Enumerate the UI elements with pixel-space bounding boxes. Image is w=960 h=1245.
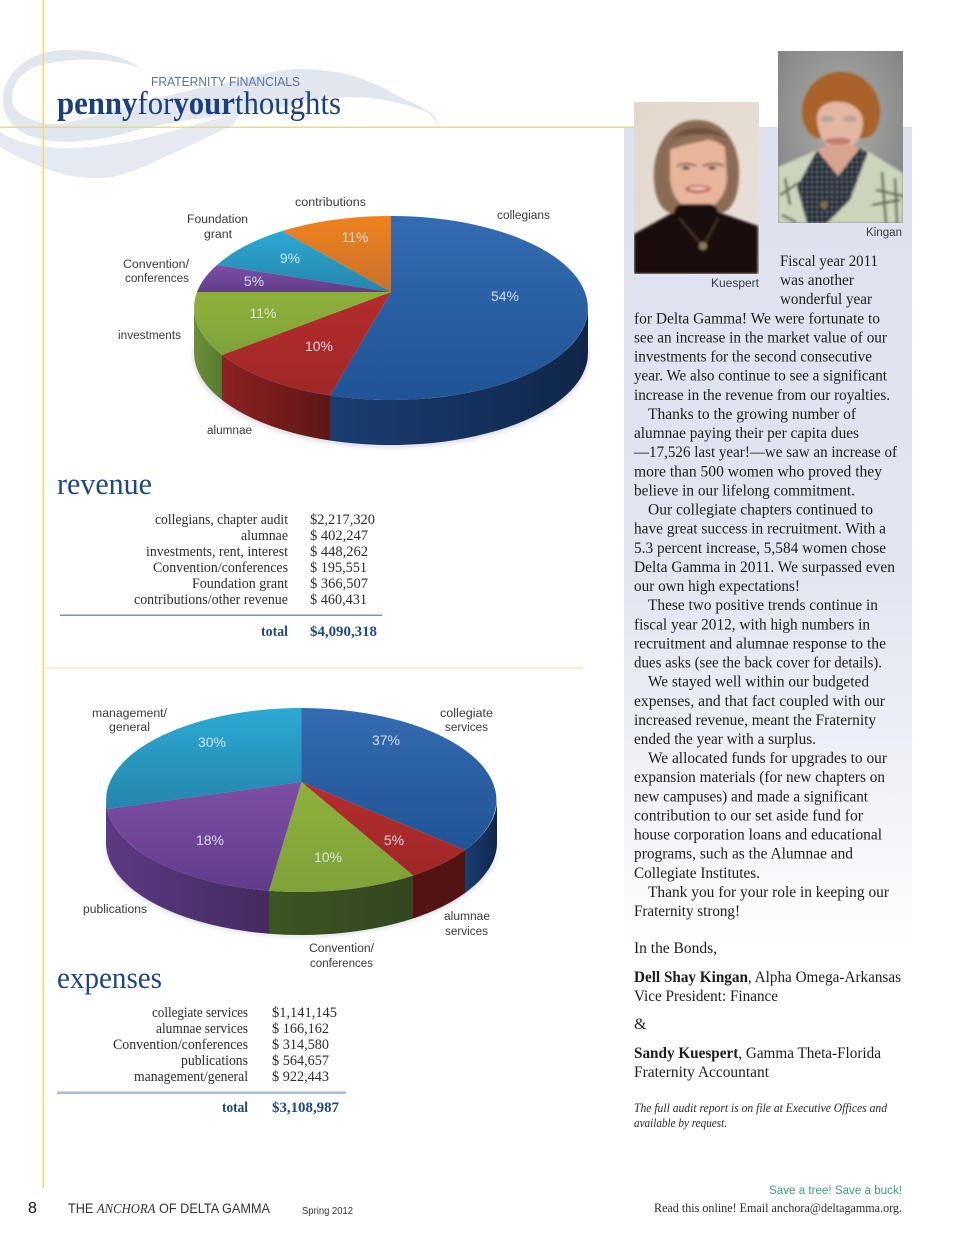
article body text: increased revenue, meant the Fraternity [634, 712, 876, 729]
percent labels: 30% [198, 734, 226, 750]
photo captions: Kingan [866, 227, 902, 239]
slice name labels: collegiate [440, 708, 493, 720]
percent labels: 10% [314, 849, 342, 865]
photo captions: Kuespert [711, 278, 760, 290]
article body text: expenses, and that fact coupled with our [634, 693, 886, 710]
footer: page number and publication: 8 [28, 1200, 37, 1217]
article body text: for Delta Gamma! We were fortunate to [634, 310, 880, 327]
expenses labels [113, 1005, 248, 1085]
right column tinted panel [624, 127, 912, 950]
expenses labels: management/general [134, 1069, 248, 1085]
signature block: Sandy Kuespert, Gamma Theta-Florida [634, 1045, 881, 1062]
expenses labels: alumnae services [156, 1021, 248, 1037]
expenses total [222, 1100, 339, 1116]
article body text: wonderful year [780, 291, 873, 308]
article body text: Our collegiate chapters continued to [648, 502, 873, 519]
expenses values [272, 1005, 337, 1085]
article body text: We allocated funds for upgrades to our [648, 750, 888, 767]
slice: alumnae services 5% [302, 782, 465, 876]
photo captions [711, 227, 902, 290]
slice name labels: services [445, 722, 488, 734]
footer: page number and publication: THE ANCHORA OF DELTA GAMMA [68, 1201, 270, 1216]
slice: foundation grant 9% [217, 231, 391, 292]
slice name labels: publications [83, 904, 147, 916]
percent labels: 5% [244, 273, 264, 289]
slice name labels [83, 708, 493, 970]
article body text: Delta Gamma in 2011. We surpassed even [634, 559, 895, 576]
article body text: contribution to our set aside fund for [634, 808, 864, 824]
percent labels: 18% [196, 832, 224, 848]
expenses table [57, 1005, 346, 1116]
article body text: house corporation loans and educational [634, 827, 883, 844]
article body text: fiscal year 2012, with high numbers in [634, 616, 870, 633]
slice name labels: alumnae [207, 425, 252, 437]
slice name labels: management/ [92, 708, 168, 720]
slice name labels: contributions [295, 197, 366, 209]
percent labels: 54% [491, 288, 519, 304]
revenue values: $2,217,320 [310, 512, 375, 528]
article body text: see an increase in the market value of our [634, 330, 888, 346]
footer: page number and publication [28, 1200, 353, 1217]
slice name labels: Foundation [187, 214, 248, 226]
revenue values: $ 366,507 [310, 576, 368, 592]
expenses labels: publications [181, 1053, 248, 1069]
soft shadow [193, 264, 589, 448]
article body text: have great success in recruitment. With a [634, 521, 886, 538]
heading: expenses: expenses [57, 960, 162, 995]
article body text: 5.3 percent increase, 5,584 women chose [634, 540, 886, 557]
slice: collegiate services 37% [302, 708, 496, 850]
percent labels: 5% [384, 832, 404, 848]
slice name labels: grant [204, 229, 233, 241]
article body text: We stayed well within our budgeted [648, 674, 869, 691]
kicker: fraternity financials: FRATERNITY FINANCIALS [151, 74, 300, 89]
revenue labels: investments, rent, interest [146, 544, 288, 560]
photo: Kuespert [634, 102, 759, 274]
signature block: Dell Shay Kingan, Alpha Omega-Arkansas [634, 969, 901, 986]
footer: save a tree callout: Save a tree! Save a buck! [769, 1185, 902, 1197]
article body text: Collegiate Institutes. [634, 865, 760, 882]
signature block: Fraternity Accountant [634, 1064, 770, 1081]
article body text: These two positive trends continue in [648, 597, 878, 614]
revenue labels: contributions/other revenue [134, 592, 288, 608]
expenses values: $ 314,580 [272, 1037, 329, 1053]
signature block [634, 940, 901, 1081]
slice: convention/conferences 10% [269, 782, 413, 892]
yellow page rules [0, 0, 634, 1188]
expenses total: total [222, 1100, 248, 1116]
article body text: was another [780, 272, 855, 289]
soft shadow [106, 755, 498, 937]
article body text: new campuses) and made a significant [634, 788, 869, 805]
percent labels: 11% [342, 229, 368, 245]
percent labels: 9% [280, 250, 300, 266]
revenue values: $ 195,551 [310, 560, 367, 576]
revenue table [60, 512, 382, 640]
signature block: & [634, 1016, 647, 1033]
revenue labels: collegians, chapter audit [155, 512, 288, 528]
photo: Kingan [778, 51, 903, 223]
footer: page number and publication: Spring 2012 [302, 1205, 353, 1217]
percent labels: 10% [305, 338, 333, 354]
revenue labels: Convention/conferences [153, 560, 288, 576]
title: penny for your thoughts: pennyforyourthoughts [57, 86, 341, 122]
revenue total [261, 624, 377, 640]
article body text: expansion materials (for new chapters on [634, 769, 885, 786]
revenue total: total [261, 624, 288, 640]
article body text: dues asks (see the back cover for details). [634, 654, 882, 672]
percent labels [244, 229, 519, 354]
revenue values [310, 512, 375, 608]
footer: save a tree callout [654, 1185, 902, 1215]
article body text: ended the year with a surplus. [634, 731, 816, 748]
expenses values: $ 166,162 [272, 1021, 329, 1037]
slice: contributions 11% [282, 216, 391, 292]
article body text: increase in the revenue from our royalties. [634, 387, 890, 404]
slice: management/general 30% [106, 708, 302, 809]
percent labels: 11% [250, 305, 276, 321]
expenses values: $ 564,657 [272, 1053, 329, 1069]
slice name labels: investments [118, 330, 181, 342]
article body text: —17,526 last year!—we saw an increase of [633, 444, 898, 461]
revenue values: $ 460,431 [310, 592, 367, 608]
slice name labels: alumnae [444, 911, 490, 923]
article body text: investments for the second consecutive [634, 349, 872, 366]
article body text: programs, such as the Alumnae and [634, 846, 853, 863]
slice name labels: services [445, 926, 488, 938]
revenue values: $ 448,262 [310, 544, 368, 560]
expenses values: $1,141,145 [272, 1005, 337, 1021]
article body text [633, 253, 898, 920]
slice name labels: conferences [125, 273, 189, 285]
slice: collegians 54% [330, 216, 588, 400]
article body text: recruitment and alumnae response to the [634, 635, 886, 652]
footer: save a tree callout: Read this online! Email anchora@deltagamma.org. [654, 1200, 902, 1215]
revenue pie chart [118, 197, 589, 448]
article body text: more than 500 women who proved they [634, 463, 882, 480]
audit note: The full audit report is on file at Executive Offices and [634, 1101, 888, 1115]
slice: alumnae 10% [222, 292, 391, 396]
article body text: alumnae paying their per capita dues [634, 425, 859, 442]
revenue total: $4,090,318 [310, 624, 377, 640]
signature block: In the Bonds, [634, 940, 717, 957]
audit note [634, 1101, 888, 1130]
article body text: Fiscal year 2011 [780, 253, 878, 270]
slice name labels: Convention/ [123, 259, 190, 271]
revenue values: $ 402,247 [310, 528, 368, 544]
slice name labels: collegians [497, 210, 550, 222]
article body text: our own high expectations! [634, 578, 800, 595]
percent labels: 37% [372, 732, 400, 748]
signature block: Vice President: Finance [634, 988, 778, 1005]
percent labels [196, 732, 404, 865]
audit note: available by request. [634, 1116, 727, 1130]
slice name labels: conferences [310, 958, 373, 970]
expenses labels: collegiate services [152, 1005, 248, 1021]
expenses values: $ 922,443 [272, 1069, 329, 1085]
slice name labels [118, 197, 550, 437]
revenue labels: Foundation grant [192, 576, 288, 592]
expenses total: $3,108,987 [272, 1100, 339, 1116]
slice: investments 11% [194, 292, 391, 355]
slice: publications 18% [107, 782, 302, 891]
section header [57, 74, 341, 122]
slice name labels: general [109, 722, 150, 734]
article body text: Thank you for your role in keeping our [648, 884, 890, 901]
article body text: Thanks to the growing number of [648, 406, 857, 423]
slice name labels: Convention/ [309, 943, 375, 955]
expenses labels: Convention/conferences [113, 1037, 248, 1053]
article body text: believe in our lifelong commitment. [634, 482, 855, 499]
pie sides [194, 308, 588, 445]
expenses pie chart [83, 708, 498, 970]
background swoosh watermark [0, 50, 440, 178]
article body text: Fraternity strong! [634, 903, 740, 920]
revenue labels: alumnae [241, 528, 288, 544]
pie sides [106, 800, 497, 935]
heading: revenue: revenue [57, 466, 152, 501]
slice: convention 5% [197, 265, 391, 292]
revenue labels [134, 512, 288, 608]
article body text: year. We also continue to see a significant [634, 368, 888, 385]
